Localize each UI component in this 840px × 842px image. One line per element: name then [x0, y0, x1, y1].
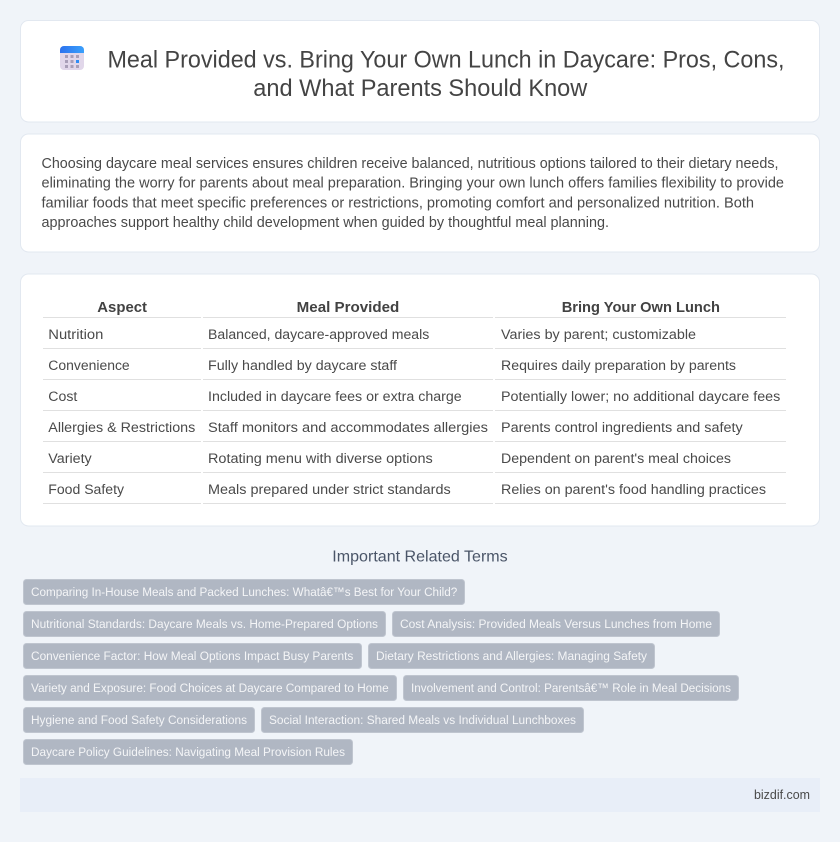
tag: Convenience Factor: How Meal Options Impact Busy Parents: [31, 649, 353, 663]
tag: Involvement and Control: Parentsâ€™ Role in Meal Decisions: [411, 681, 731, 695]
tag: [392, 612, 720, 636]
tag: Variety and Exposure: Food Choices at Daycare Compared to Home: [31, 681, 389, 695]
tag: Comparing In-House Meals and Packed Lunches: Whatâ€™s Best for Your Child?: [31, 585, 458, 599]
footer: bizdif.com: [754, 788, 810, 802]
table row: nutrition: Varies by parent; customizable: [501, 327, 696, 343]
table row: nutrition: [48, 327, 696, 343]
tag: Social Interaction: Shared Meals vs Individual Lunchboxes: [269, 713, 576, 727]
table header: Meal Provided: [297, 299, 399, 316]
table row: cost: Cost: [48, 389, 77, 405]
panel: comparison table: [20, 274, 820, 526]
tag: Nutritional Standards: Daycare Meals vs. Home-Prepared Options: [31, 617, 378, 631]
table row: convenience: Fully handled by daycare staff: [208, 358, 397, 374]
icon: calendar: [60, 46, 84, 70]
tag: Dietary Restrictions and Allergies: Managing Safety: [376, 649, 648, 663]
title: [108, 46, 784, 102]
table row: variety: Variety: [48, 451, 93, 467]
table header: Bring Your Own Lunch: [562, 299, 720, 316]
table row: allergies and restrictions: Staff monitors and accommodates allergies: [208, 420, 488, 436]
table row: nutrition: Nutrition: [48, 327, 103, 343]
table header: [97, 299, 720, 316]
tag: Daycare Policy Guidelines: Navigating Meal Provision Rules: [31, 745, 345, 759]
footer: [20, 778, 820, 812]
table row: allergies and restrictions: [48, 420, 744, 436]
panel: title card: [20, 20, 820, 122]
tag: [404, 676, 738, 700]
table row: variety: Rotating menu with diverse options: [208, 451, 433, 467]
tag: [24, 676, 396, 700]
table row: allergies and restrictions: Parents control ingredients and safety: [501, 420, 744, 436]
table row: convenience: Convenience: [48, 358, 130, 374]
table row: cost: [48, 389, 780, 405]
tag list: related terms: [24, 580, 738, 764]
text block: introduction paragraph: eliminating the worry for parents about meal preparation. Bringing your own lunch offers families flexibility to provide: [42, 176, 784, 192]
panel: introduction: [20, 134, 820, 252]
table header: Aspect: [97, 299, 147, 316]
tag: [24, 612, 386, 636]
tag: [24, 740, 352, 764]
tag: [24, 644, 362, 668]
title: Meal Provided vs. Bring Your Own Lunch in Daycare: Pros, Cons,: [108, 46, 784, 74]
table row: nutrition: Balanced, daycare-approved meals: [208, 327, 429, 343]
text block: introduction paragraph: [42, 156, 784, 231]
tag: Cost Analysis: Provided Meals Versus Lunches from Home: [400, 617, 712, 631]
table row: food safety: Food Safety: [48, 482, 125, 498]
table row: convenience: Requires daily preparation by parents: [501, 358, 736, 374]
text block: introduction paragraph: Choosing daycare meal services ensures children receive balanced, nutritious options tailored to their dietary needs,: [42, 156, 778, 172]
table row: food safety: Relies on parent's food handling practices: [501, 482, 766, 498]
table row: variety: Dependent on parent's meal choices: [501, 451, 731, 467]
tag: [24, 708, 254, 732]
title: and What Parents Should Know: [253, 75, 588, 102]
table row: food safety: Meals prepared under strict standards: [208, 482, 451, 498]
tag: [262, 708, 584, 732]
tag: Hygiene and Food Safety Considerations: [31, 713, 247, 727]
table row: cost: Included in daycare fees or extra charge: [208, 389, 462, 405]
text block: introduction paragraph: approaches support healthy child development when guided by thoughtful meal planning.: [42, 215, 609, 231]
table row: allergies and restrictions: Allergies & Restrictions: [48, 420, 195, 436]
table row: convenience: [48, 358, 736, 374]
tag: [24, 580, 464, 604]
heading: important related terms: Important Related Terms: [332, 549, 508, 566]
table row: variety: [48, 451, 731, 467]
table row: food safety: [48, 482, 766, 498]
tag: [368, 644, 654, 668]
table row: cost: Potentially lower; no additional daycare fees: [501, 389, 780, 405]
text block: introduction paragraph: familiar foods that meet specific preferences or restrictions, promoting comfort and personalized nutrition. Both: [42, 196, 754, 212]
